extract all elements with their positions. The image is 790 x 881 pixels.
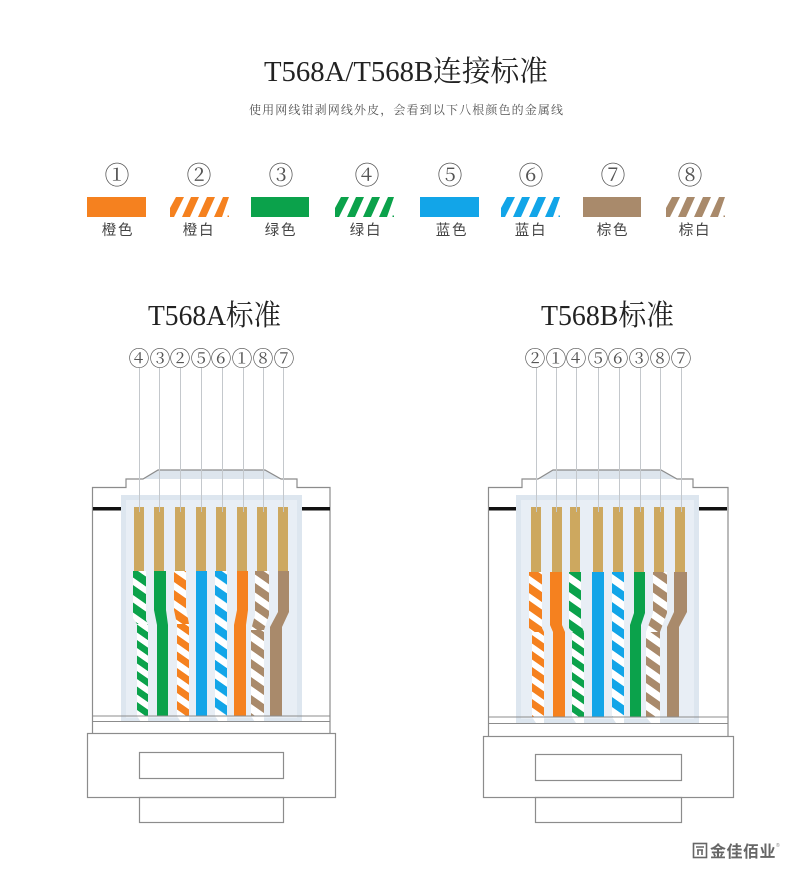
pin order numbers A: ⑥ [210,343,232,373]
legend 4: green white [335,156,394,239]
legend 6: blue white [501,156,560,239]
pin order numbers A [128,343,294,373]
pin order numbers A: ③ [150,343,170,373]
registered mark: ® [776,842,780,849]
panel: colour legend [87,156,725,239]
legend 8: brown white: ⑧ [677,156,703,192]
legend 2: orange white [170,156,229,239]
logo text: 金佳佰业 [710,842,776,861]
panel: T568B connector [484,343,734,822]
legend 8: brown white [666,156,725,239]
gold contacts B [531,507,685,572]
logo icon [694,844,706,858]
legend 2: orange white: ② [186,156,212,192]
legend 4: green white: 绿白 [350,222,382,239]
subtitle: 使用网线钳剥网线外皮，会看到以下八根颜色的金属线 [249,102,563,117]
legend 3: green [251,156,309,239]
pin order numbers B: ⑥ [608,343,628,373]
leader lines A [140,368,284,512]
boot lines B [489,717,728,724]
gold contacts A [134,507,288,572]
legend 3: green: 绿色 [265,222,297,239]
pin order numbers A: ② [170,343,190,373]
legend 5: blue: 蓝色 [436,222,468,239]
pin order numbers B: ⑤ [588,343,608,373]
legend 5: blue [420,156,479,239]
legend 5: blue: ⑤ [437,156,463,192]
legend 7: brown: ⑦ [600,156,626,192]
connector body B [488,470,728,736]
pin order numbers A: ⑤ [190,343,212,373]
pin order numbers A: ⑦ [274,343,294,373]
pin order numbers B: ⑧ [650,343,670,373]
pin order numbers B: ① [546,343,566,373]
logo [694,842,780,861]
legend 1: orange: ① [104,156,130,192]
legend 7: brown [583,156,641,239]
title: T568A/T568B连接标准 [264,55,548,88]
legend 7: brown: 棕色 [597,222,629,239]
legend 1: orange [87,156,146,239]
boot lines A [93,716,330,722]
plug A [88,734,336,822]
panel: T568A connector [88,343,336,822]
wires A [133,571,289,722]
pin order numbers B [524,343,692,373]
legend 3: green: ③ [268,156,294,192]
pin order numbers A: ① [232,343,252,373]
leader lines B [536,368,682,512]
heading: T568A: T568A标准 [148,299,281,332]
legend 4: green white: ④ [354,156,380,192]
plug B [484,736,734,822]
legend 1: orange: 橙色 [102,222,134,239]
connector body A [92,470,330,733]
legend 8: brown white: 棕白 [679,222,711,239]
pin order numbers B: ④ [566,343,586,373]
legend 6: blue white: ⑥ [518,156,544,192]
heading: T568B: T568B标准 [541,299,674,332]
legend 2: orange white: 橙白 [183,222,215,239]
pin order numbers B: ② [524,343,546,373]
pin order numbers A: ④ [128,343,150,373]
legend 6: blue white: 蓝白 [515,222,547,239]
wires B [529,572,687,723]
pin order numbers B: ⑦ [670,343,692,373]
pin order numbers B: ③ [628,343,650,373]
pin order numbers A: ⑧ [252,343,274,373]
